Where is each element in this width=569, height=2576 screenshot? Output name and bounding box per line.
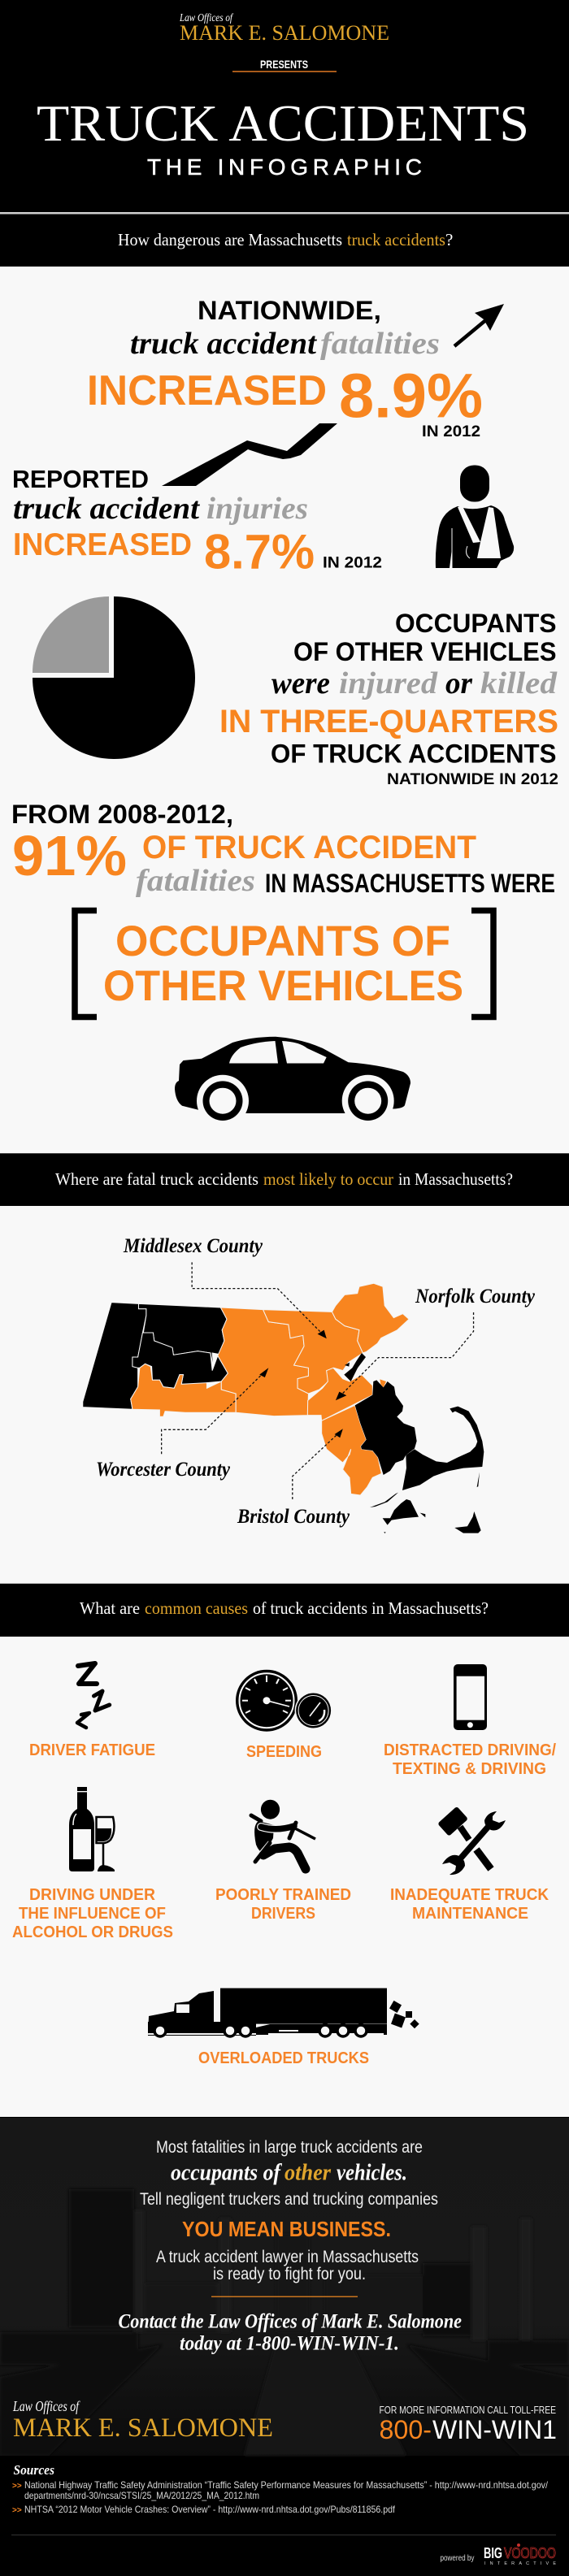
stat: 91% of fatalities <box>11 800 555 898</box>
cause: distracted driving: DISTRACTED DRIVING/ <box>384 1741 556 1759</box>
stat: fatalities increased 8.9%: INCREASED <box>87 367 327 414</box>
section header: causes: What are <box>80 1598 140 1618</box>
section header: where: in Massachusetts? <box>398 1169 513 1189</box>
cause: speeding <box>236 1670 332 1761</box>
icon: wine bottle and glass <box>69 1787 115 1871</box>
cause: poorly trained drivers: DRIVERS <box>251 1905 315 1923</box>
cause: poorly trained drivers: POORLY TRAINED <box>215 1886 351 1904</box>
stat: injuries increased 8.7%: 8.7% <box>204 525 315 579</box>
callout: bracketed occupants of other vehicles: OCCUPANTS OF <box>115 917 450 965</box>
powered by credit: VOODOO <box>504 2545 556 2561</box>
call to action text: Tell negligent truckers and trucking companies <box>140 2190 438 2209</box>
call to action text: vehicles. <box>337 2160 407 2186</box>
callout: bracketed occupants of other vehicles <box>75 910 493 1017</box>
stat: three-quarters of accidents: OCCUPANTS <box>395 609 556 638</box>
icon: hammer and wrench <box>437 1806 506 1875</box>
icon: sleeping Z's <box>77 1663 110 1728</box>
icon: rising arrow <box>454 304 504 346</box>
presents label: PRESENTS <box>260 58 308 71</box>
cause: driving under the influence: THE INFLUENCE OF <box>19 1905 166 1923</box>
county labels: Bristol County <box>237 1506 350 1528</box>
dashed leader lines with arrowheads <box>162 1262 474 1499</box>
stat: three-quarters of accidents: were <box>271 666 330 700</box>
section question: danger: How dangerous are Massachusetts <box>118 230 342 249</box>
icon: speedometers <box>236 1670 332 1732</box>
powered by credit <box>441 2543 556 2566</box>
sources <box>11 2462 556 2535</box>
sources: Sources <box>13 2462 54 2478</box>
stat: fatalities increased 8.9%: 8.9% <box>339 361 483 431</box>
call to action text: YOU MEAN BUSINESS. <box>182 2217 391 2241</box>
stat: three-quarters of accidents: killed <box>480 666 558 700</box>
call to action text <box>119 2138 462 2355</box>
subtitle: THE INFOGRAPHIC <box>147 154 422 180</box>
powered by credit: BIG <box>484 2545 502 2561</box>
call to action text: A truck accident lawyer in Massachusetts <box>156 2248 419 2266</box>
section question: danger: ? <box>445 230 453 249</box>
toll-free phone number: 800- <box>379 2415 432 2444</box>
section question: danger: truck accidents <box>347 230 445 249</box>
stat: three-quarters of accidents <box>219 609 558 788</box>
cause: driving under the influence: DRIVING UNDER <box>29 1886 156 1904</box>
stat: injuries increased 8.7%: truck accident <box>13 492 200 526</box>
cause: inadequate maintenance: MAINTENANCE <box>412 1905 528 1923</box>
stat: three-quarters of accidents: NATIONWIDE IN 2012 <box>387 771 558 788</box>
header panel <box>0 0 569 267</box>
title: TRUCK ACCIDENTS <box>37 94 529 152</box>
footer logo: MARK E. SALOMONE <box>13 2413 273 2443</box>
stat: 91% of fatalities: 91% <box>12 824 127 887</box>
stat: injuries increased 8.7%: INCREASED <box>13 527 192 562</box>
stat: three-quarters of accidents: injured <box>339 666 438 700</box>
footer logo: Law Offices of <box>12 2398 80 2414</box>
background cityscape <box>0 2189 569 2456</box>
sources: departments/nrd-30/ncsa/STSI/25_MA/2012/25_MA_2012.htm <box>24 2490 259 2501</box>
cause: driver fatigue <box>29 1663 155 1759</box>
toll-free phone number <box>379 2404 557 2444</box>
cause: inadequate maintenance: INADEQUATE TRUCK <box>390 1886 549 1904</box>
stat: three-quarters of accidents: OF TRUCK ACCIDENTS <box>271 739 556 769</box>
county labels: Worcester County <box>96 1459 231 1481</box>
stat: 91% of fatalities: OF TRUCK ACCIDENT <box>142 830 476 865</box>
stat: three-quarters of accidents: OF OTHER VEHICLES <box>293 637 556 666</box>
law firm logo: MARK E. SALOMONE <box>180 21 389 45</box>
cause: distracted driving <box>384 1664 556 1778</box>
sources: >> <box>12 2482 22 2491</box>
cause: poorly trained drivers <box>215 1800 351 1923</box>
cause: distracted driving: TEXTING & DRIVING <box>393 1760 546 1778</box>
cause: driving under the influence <box>12 1787 173 1941</box>
call to action text: today at 1-800-WIN-WIN-1. <box>180 2332 399 2355</box>
section header: where: Where are fatal truck accidents <box>55 1169 258 1189</box>
presents label <box>232 58 337 72</box>
cause: driving under the influence: ALCOHOL OR DRUGS <box>12 1923 173 1941</box>
icon: smartphone <box>454 1664 487 1730</box>
section header: causes <box>0 1583 569 1637</box>
powered by credit: powered by <box>441 2554 475 2563</box>
stat: injuries increased 8.7% <box>12 465 382 579</box>
icon: injured person with sling <box>436 465 514 568</box>
call to action text: is ready to fight for you. <box>213 2265 366 2283</box>
call to action text: Most fatalities in large truck accidents are <box>156 2138 423 2157</box>
cause: inadequate maintenance <box>390 1806 549 1923</box>
powered by credit: INTERACTIVE <box>484 2561 556 2566</box>
cause: speeding: SPEEDING <box>246 1743 322 1761</box>
cause: overloaded trucks <box>148 1988 419 2067</box>
map of Massachusetts counties <box>83 1262 484 1533</box>
stat: three-quarters of accidents: IN THREE-QUARTERS <box>219 704 558 739</box>
footer logo <box>12 2398 273 2443</box>
stat: injuries increased 8.7%: REPORTED <box>12 465 149 493</box>
stat: fatalities increased 8.9%: fatalities <box>320 327 440 361</box>
cause: overloaded trucks: OVERLOADED TRUCKS <box>198 2049 369 2067</box>
stat: fatalities increased 8.9%: IN 2012 <box>422 423 480 440</box>
icon: car <box>175 1037 410 1127</box>
icon: rising zigzag trend line <box>162 423 337 486</box>
sources: NHTSA “2012 Motor Vehicle Crashes: Overview” - http://www-nrd.nhtsa.dot.gov/Pubs/811856.pdf <box>24 2504 396 2515</box>
toll-free phone number: WIN-WIN1 <box>432 2415 557 2444</box>
law firm logo: Law Offices of <box>179 12 234 24</box>
sources: >> <box>12 2506 22 2515</box>
stat: injuries increased 8.7%: IN 2012 <box>323 554 382 572</box>
call to action text: occupants of <box>171 2160 282 2186</box>
county labels: Middlesex County <box>123 1235 263 1257</box>
stat: fatalities increased 8.9% <box>87 296 483 440</box>
footer panel with city background <box>0 2117 569 2576</box>
eastern counties and islands <box>307 1353 484 1533</box>
stat: injuries increased 8.7%: injuries <box>206 492 308 526</box>
county labels <box>96 1235 536 1528</box>
icon: seat-belted driver <box>251 1800 315 1869</box>
western and central counties <box>83 1283 409 1416</box>
section header: where <box>0 1153 569 1206</box>
stat: fatalities increased 8.9%: truck accident <box>130 327 317 361</box>
pie chart: three-quarters <box>33 596 195 759</box>
cause: driver fatigue: DRIVER FATIGUE <box>29 1741 155 1759</box>
stat: three-quarters of accidents: or <box>445 666 473 700</box>
call to action text: Contact the Law Offices of Mark E. Salomone <box>119 2311 462 2332</box>
call to action text: other <box>284 2160 332 2186</box>
icon: semi truck with falling cargo <box>148 1988 419 2036</box>
section header: causes: common causes <box>145 1598 248 1618</box>
section header: causes: of truck accidents in Massachusetts? <box>253 1598 489 1618</box>
stat: 91% of fatalities: fatalities <box>136 864 255 898</box>
section header: where: most likely to occur <box>263 1169 393 1189</box>
stat: fatalities increased 8.9%: NATIONWIDE, <box>198 296 381 325</box>
county labels: Norfolk County <box>415 1286 536 1308</box>
callout: bracketed occupants of other vehicles: OTHER VEHICLES <box>103 962 463 1010</box>
stat: 91% of fatalities: FROM 2008-2012, <box>11 800 233 829</box>
